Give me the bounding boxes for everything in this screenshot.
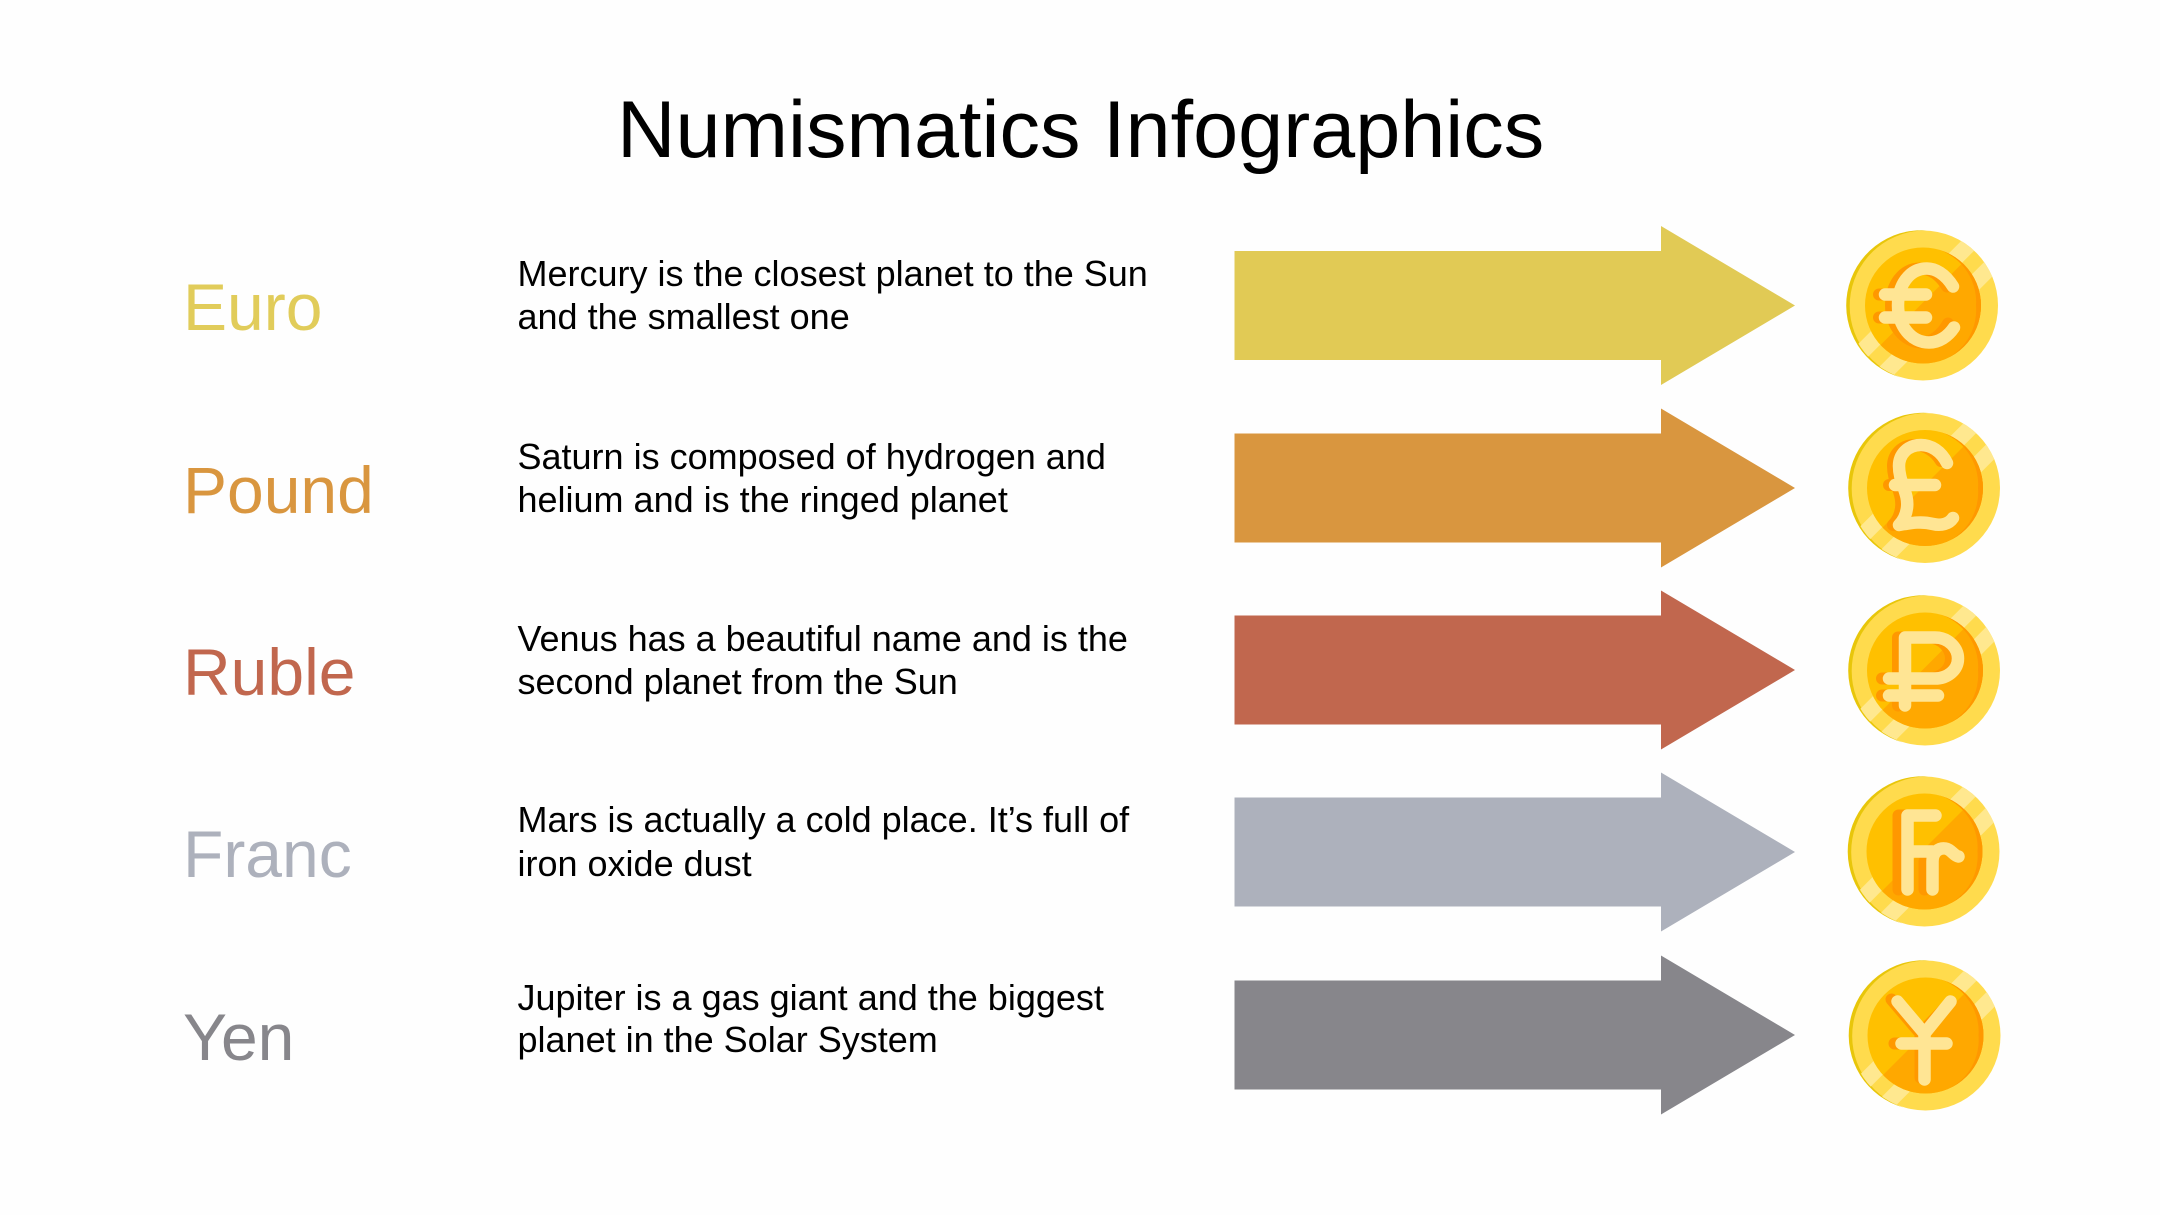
- icon: euro coin: [1833, 216, 2013, 396]
- label: Euro: Euro: [183, 270, 322, 344]
- label: Ruble: Ruble: [183, 635, 355, 709]
- description: Franc: iron oxide dust: [518, 843, 752, 884]
- label: Franc: Franc: [183, 817, 352, 891]
- arrow: Pound: [1234, 408, 1795, 568]
- row: yen: [183, 946, 2016, 1126]
- row: euro: [183, 216, 2013, 396]
- label: Yen: Yen: [183, 1000, 294, 1074]
- icon: franc coin: [1834, 762, 2014, 942]
- description: Yen: planet in the Solar System: [518, 1019, 938, 1060]
- arrow: Yen: [1234, 956, 1795, 1114]
- description: Yen: Jupiter is a gas giant and the biggest: [518, 977, 1104, 1018]
- icon: ruble coin: [1835, 580, 2015, 760]
- label: Pound: Pound: [183, 453, 374, 527]
- description: Pound: Saturn is composed of hydrogen and: [518, 436, 1106, 477]
- description: Franc: Mars is actually a cold place. It’s full of: [518, 799, 1130, 840]
- row: ruble: [183, 580, 2015, 760]
- title: Numismatics Infographics: [617, 85, 1544, 175]
- description: Euro: Mercury is the closest planet to the Sun: [518, 253, 1148, 294]
- row: franc: [183, 762, 2014, 942]
- description: Pound: helium and is the ringed planet: [518, 479, 1008, 520]
- description: Euro: and the smallest one: [518, 296, 850, 337]
- row: pound: [183, 398, 2015, 578]
- arrow: Euro: [1234, 226, 1795, 385]
- icon: yen coin: [1836, 946, 2016, 1126]
- icon: pound coin: [1835, 398, 2015, 578]
- description: Ruble: Venus has a beautiful name and is the: [518, 618, 1128, 659]
- arrow: Franc: [1234, 772, 1795, 932]
- description: Ruble: second planet from the Sun: [518, 661, 958, 702]
- arrow: Ruble: [1234, 590, 1795, 750]
